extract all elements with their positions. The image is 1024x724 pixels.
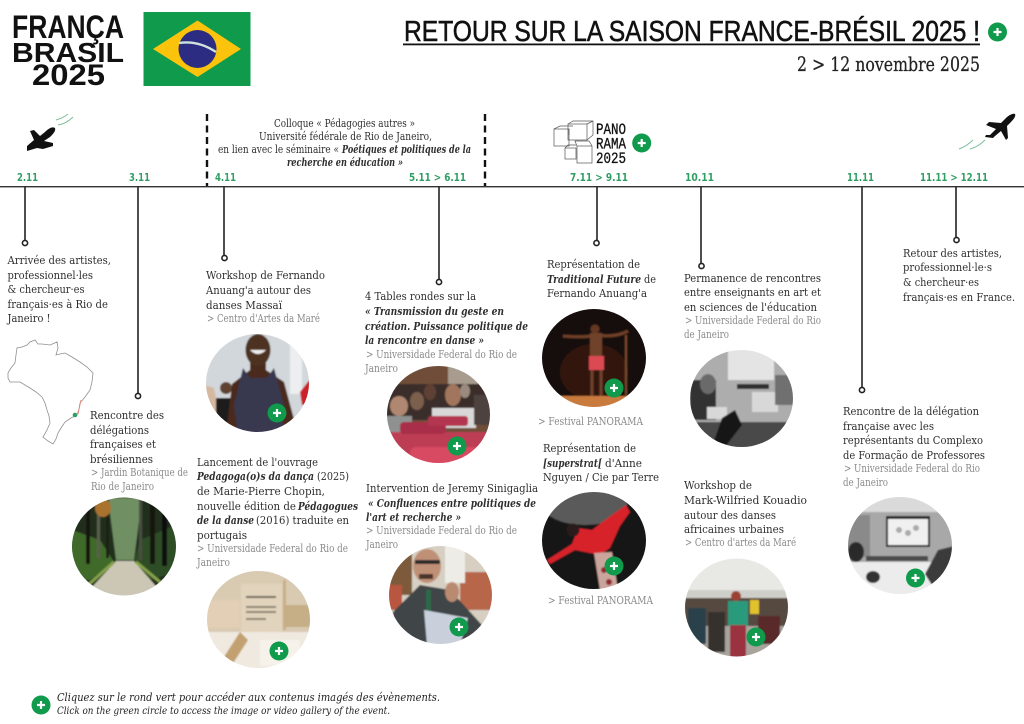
text: workshop Fernando <box>205 268 325 325</box>
icon: legend plus button <box>32 696 50 714</box>
text: workshop Fernando: > Centro d'Artes da Maré <box>207 312 320 325</box>
text: colloque: Université fédérale de Rio de Janeiro, <box>259 129 432 143</box>
text: superstrat: [superstrat[ <box>543 456 602 470</box>
dates on the timeline: 3.11 <box>129 172 150 184</box>
subtitle: dates: 2 > 12 novembre 2025 <box>797 53 980 76</box>
dates on the timeline: 10.11 <box>685 172 714 184</box>
text: superstrat: Représentation de <box>543 441 636 455</box>
text: rencontre des délégations: françaises et <box>90 437 156 451</box>
text: rencontre des délégations <box>90 408 188 493</box>
text: lancement de l'ouvrage: de la danse <box>197 513 254 527</box>
text: rencontre des délégations: > Jardin Botanique de <box>91 466 188 479</box>
icon: arriving plane <box>27 114 73 151</box>
text: rencontre Complexo: Rencontre de la délégation <box>843 404 979 418</box>
dates on the timeline: 2.11 <box>17 172 38 184</box>
text: arrivée: français·es à Rio de <box>8 297 108 311</box>
panorama logo: PANO <box>596 121 626 139</box>
text: festival Panorama 1: > Festival PANORAMA <box>538 415 644 428</box>
text: intervention Jeremy: > Universidade Federal do Rio de <box>366 524 517 537</box>
dates on the timeline: 4.11 <box>215 172 236 184</box>
text: colloque: en lien avec le séminaire « <box>218 142 339 156</box>
text: lancement de l'ouvrage: (2025) <box>317 469 349 483</box>
legend text: Click on the green circle to access the image or video gallery of the event. <box>57 705 390 717</box>
icon: superstrat plus button <box>604 556 624 576</box>
photo: Jeremy speaking <box>389 546 492 644</box>
text: intervention Jeremy: Janeiro <box>365 538 398 551</box>
icon: Complexo plus button <box>906 568 925 588</box>
text: rencontre Complexo: > Universidade Federal do Rio <box>844 462 980 475</box>
text: superstrat <box>543 441 659 484</box>
text: Traditional Future: Représentation de <box>547 257 640 271</box>
text: workshop Mark-Wilfried: > Centro d'artes da Maré <box>685 536 796 549</box>
panorama logo: RAMA <box>596 136 627 154</box>
dates on the timeline: 5.11 > 6.11 <box>409 172 466 184</box>
text: arrivée: Arrivée des artistes, <box>7 253 111 267</box>
icon: title plus button <box>988 22 1007 42</box>
text: permanence: Permanence de rencontres <box>684 271 821 285</box>
icon: workshop plus button <box>268 404 286 422</box>
text: workshop Mark-Wilfried: Workshop de <box>684 478 752 492</box>
text: tables rondes: la rencontre en danse » <box>365 333 484 347</box>
text: colloque: recherche en éducation » <box>287 155 403 169</box>
text: rencontre des délégations: Rio de Janeiro <box>91 480 154 493</box>
photo: workshop Mark-Wilfried <box>685 558 788 656</box>
text: lancement de l'ouvrage: (2016) traduite en <box>256 513 349 527</box>
legend text: Cliquez sur le rond vert pour accéder aux contenus imagés des évènements. <box>57 690 440 704</box>
photo: Complexo meeting <box>846 495 954 597</box>
text: rencontre Complexo <box>843 404 985 489</box>
text: permanence: en sciences de l'éducation <box>684 300 817 314</box>
text: workshop Mark-Wilfried <box>684 478 807 549</box>
text: rencontre Complexo: représentants du Complexo <box>843 433 983 447</box>
photo: book launch <box>207 571 310 668</box>
photo: superstrat <box>542 492 646 589</box>
text: retour: & chercheur·es <box>903 275 979 289</box>
photo: workshop Fernando <box>204 332 312 434</box>
text: rencontre des délégations: Rencontre des <box>90 408 164 422</box>
text: tables rondes: « Transmission du geste en <box>365 304 504 318</box>
text: lancement de l'ouvrage: Lancement de l'ouvrage <box>197 455 318 469</box>
text: rencontre Complexo: de Janeiro <box>843 476 888 489</box>
text: colloque: Colloque « Pédagogies autres » <box>274 116 415 130</box>
dates on the timeline: 11.11 <box>847 172 874 184</box>
text: rencontre des délégations: brésiliennes <box>90 452 153 466</box>
photo: round table audience <box>387 366 490 463</box>
map of Brazil <box>8 340 93 444</box>
text: rencontre Complexo: de Formação de Professores <box>843 448 985 462</box>
text: colloque <box>218 116 471 169</box>
text: tables rondes: création. Puissance politique de <box>365 319 528 333</box>
icon: Traditional Future plus button <box>604 378 624 398</box>
text: lancement de l'ouvrage <box>196 455 358 569</box>
icon: book plus button <box>270 642 288 660</box>
text: intervention Jeremy: « Confluences entre politiques de <box>368 496 536 510</box>
photo: Traditional Future <box>540 307 648 409</box>
icon: Jeremy plus button <box>450 618 468 636</box>
text: intervention Jeremy <box>365 481 538 551</box>
text: workshop Mark-Wilfried: Mark-Wilfried Kouadio <box>684 493 807 507</box>
text: retour: professionnel·le·s <box>903 260 992 274</box>
dates on the timeline: 11.11 > 12.11 <box>920 172 988 184</box>
logo: França Brasil 2025 <box>12 9 124 92</box>
text: permanence: entre enseignants en art et <box>684 285 821 299</box>
text: lancement de l'ouvrage: portugais <box>197 528 247 542</box>
photo: permanence <box>688 348 796 450</box>
text: superstrat: Nguyen / Cie par Terre <box>543 470 659 484</box>
text: lancement de l'ouvrage: nouvelle édition de <box>197 499 296 513</box>
text: lancement de l'ouvrage: Janeiro <box>196 556 230 569</box>
panorama logo: 2025 <box>596 150 626 168</box>
text: superstrat: d'Anne <box>605 456 642 470</box>
text: rencontre Complexo: française avec les <box>843 419 934 433</box>
text: Traditional Future: Traditional Future <box>547 272 641 286</box>
photo: jardin botanique <box>72 498 176 596</box>
text: lancement de l'ouvrage: Pédagogues <box>297 499 358 513</box>
dates on the timeline <box>17 172 988 184</box>
text: arrivée: Janeiro ! <box>7 311 50 325</box>
logo: França Brasil 2025: 2025 <box>32 59 105 92</box>
icon: Mark-Wilfried plus button <box>746 628 766 646</box>
text: permanence <box>684 271 821 341</box>
text: Traditional Future <box>547 257 656 300</box>
text: Traditional Future: Fernando Anuang'a <box>547 286 647 300</box>
text: workshop Mark-Wilfried: africaines urbaines <box>684 522 784 536</box>
logo: França Brasil 2025: BRASIL <box>12 37 124 68</box>
text: tables rondes: Janeiro <box>364 362 398 375</box>
text: Traditional Future: de <box>644 272 656 286</box>
text: rencontre des délégations: délégations <box>90 423 149 437</box>
text: permanence: de Janeiro <box>684 328 729 341</box>
text: workshop Mark-Wilfried: autour des danses <box>684 508 776 522</box>
text: workshop Fernando: danses Massaï <box>206 298 282 312</box>
text: tables rondes: 4 Tables rondes sur la <box>365 289 476 303</box>
legend text <box>57 690 440 717</box>
dates on the timeline: 7.11 > 9.11 <box>570 172 628 184</box>
text: intervention Jeremy: Intervention de Jeremy Sinigaglia <box>366 481 538 495</box>
text: tables rondes: > Universidade Federal do Rio de <box>366 348 517 361</box>
text: retour: Retour des artistes, <box>903 246 1002 260</box>
text: lancement de l'ouvrage: > Universidade Federal do Rio de <box>197 542 348 555</box>
text: arrivée: professionnel·les <box>8 268 93 282</box>
text: intervention Jeremy: l'art et recherche » <box>366 510 461 524</box>
icon: returning plane <box>959 114 1015 149</box>
text: retour <box>903 246 1015 304</box>
text: arrivée <box>7 253 111 325</box>
icon: Brazilian flag <box>144 12 250 86</box>
timeline with stems <box>0 114 1024 399</box>
icon: tables plus button <box>448 436 466 456</box>
icon: panorama plus button <box>632 134 651 152</box>
logo: França Brasil 2025: FRANÇA <box>12 9 124 45</box>
text: colloque: Poétiques et politiques de la <box>341 142 471 156</box>
panorama logo <box>554 121 627 168</box>
text: arrivée: & chercheur·es <box>8 282 85 296</box>
text: tables rondes <box>364 289 528 375</box>
text: permanence: > Universidade Federal do Rio <box>685 314 821 327</box>
text: festival Panorama 2: > Festival PANORAMA <box>548 594 654 607</box>
text: workshop Fernando: Workshop de Fernando <box>206 268 325 282</box>
text: lancement de l'ouvrage: de Marie-Pierre Chopin, <box>197 484 325 498</box>
text: lancement de l'ouvrage: Pedagoga(o)s da dança <box>196 469 314 483</box>
text: workshop Fernando: Anuang'a autour des <box>205 283 311 297</box>
